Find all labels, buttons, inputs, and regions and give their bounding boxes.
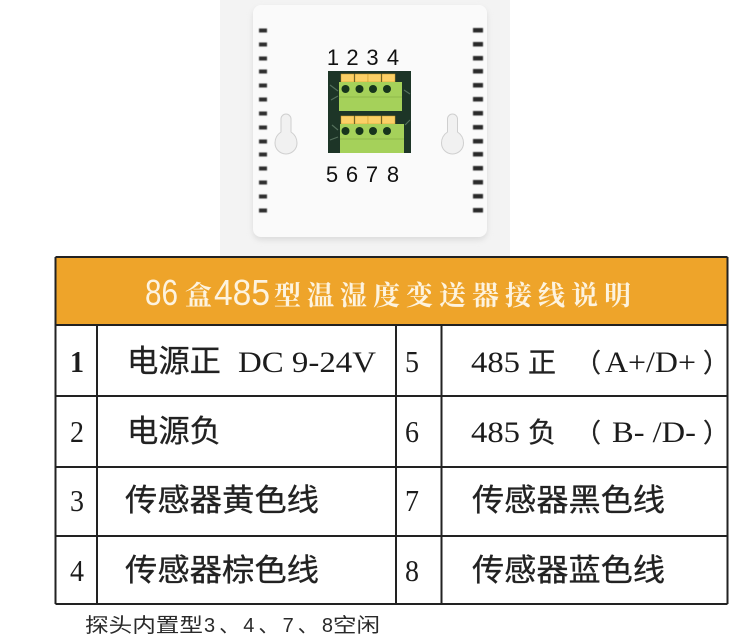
device plate: [253, 5, 487, 240]
terminal numbers top: 1: [327, 45, 339, 70]
row 1: [70, 344, 729, 379]
terminal numbers top: [327, 45, 399, 70]
row 1: A+/D+: [605, 346, 696, 379]
title: 盒: [185, 274, 212, 313]
row 3: [70, 483, 665, 518]
upper terminal block: [339, 74, 402, 111]
row 1: （: [575, 348, 601, 378]
row 4: 8: [405, 553, 419, 588]
row 2: 电源负: [127, 414, 221, 449]
row 4: 4: [70, 553, 84, 588]
row 1: 5: [405, 344, 419, 379]
row 1: 1: [70, 344, 84, 379]
terminal numbers top: 2: [346, 45, 359, 70]
row 2: 485: [471, 416, 520, 449]
terminal numbers bottom: [326, 162, 399, 187]
title: 型温湿度变送器接线说明: [274, 274, 631, 313]
terminal numbers bottom: 5: [326, 162, 338, 187]
icon: left keyhole: [275, 114, 297, 154]
row 2: ）: [703, 418, 729, 448]
row 3: 7: [405, 483, 419, 518]
terminal numbers bottom: 6: [346, 162, 358, 187]
row 3: 3: [70, 483, 84, 518]
terminal numbers top: 4: [387, 45, 399, 70]
row 3: 传感器黄色线: [125, 483, 319, 518]
footnote: [85, 614, 380, 637]
row 2: 负: [528, 417, 556, 448]
vent slots right: [473, 28, 483, 212]
terminal numbers bottom: 8: [387, 162, 399, 187]
row 1: ）: [703, 348, 729, 378]
icon: right keyhole: [442, 114, 464, 154]
row 2: （: [575, 418, 601, 448]
wiring table: [56, 257, 729, 604]
row 2: 6: [405, 414, 419, 449]
row 4: 传感器蓝色线: [472, 553, 665, 588]
footnote: 探头内置型: [85, 614, 203, 637]
vent slots left: [259, 28, 267, 212]
row 4: [70, 553, 665, 588]
terminal numbers top: 3: [366, 45, 379, 70]
row 1: 正: [528, 347, 556, 378]
table grid: [56, 257, 728, 604]
terminal numbers bottom: 7: [366, 162, 378, 187]
row 2: B- /D-: [612, 416, 696, 449]
terminal board: [328, 71, 411, 153]
row 1: 电源正: [127, 344, 221, 379]
row 3: 传感器黑色线: [472, 483, 665, 518]
row 2: [70, 414, 729, 449]
row 2: 2: [70, 414, 84, 449]
title: 485: [214, 272, 270, 313]
title: 86: [145, 272, 178, 313]
row 1: 485: [471, 346, 520, 379]
row 4: 传感器棕色线: [125, 553, 319, 588]
footnote: 3、4、7、8: [204, 615, 333, 637]
title: [145, 272, 631, 313]
product photo: [220, 0, 510, 257]
lower terminal block: [340, 116, 404, 153]
table header band: [56, 257, 728, 325]
footnote: 空闲: [333, 614, 380, 637]
row 1: DC 9-24V: [238, 346, 376, 379]
